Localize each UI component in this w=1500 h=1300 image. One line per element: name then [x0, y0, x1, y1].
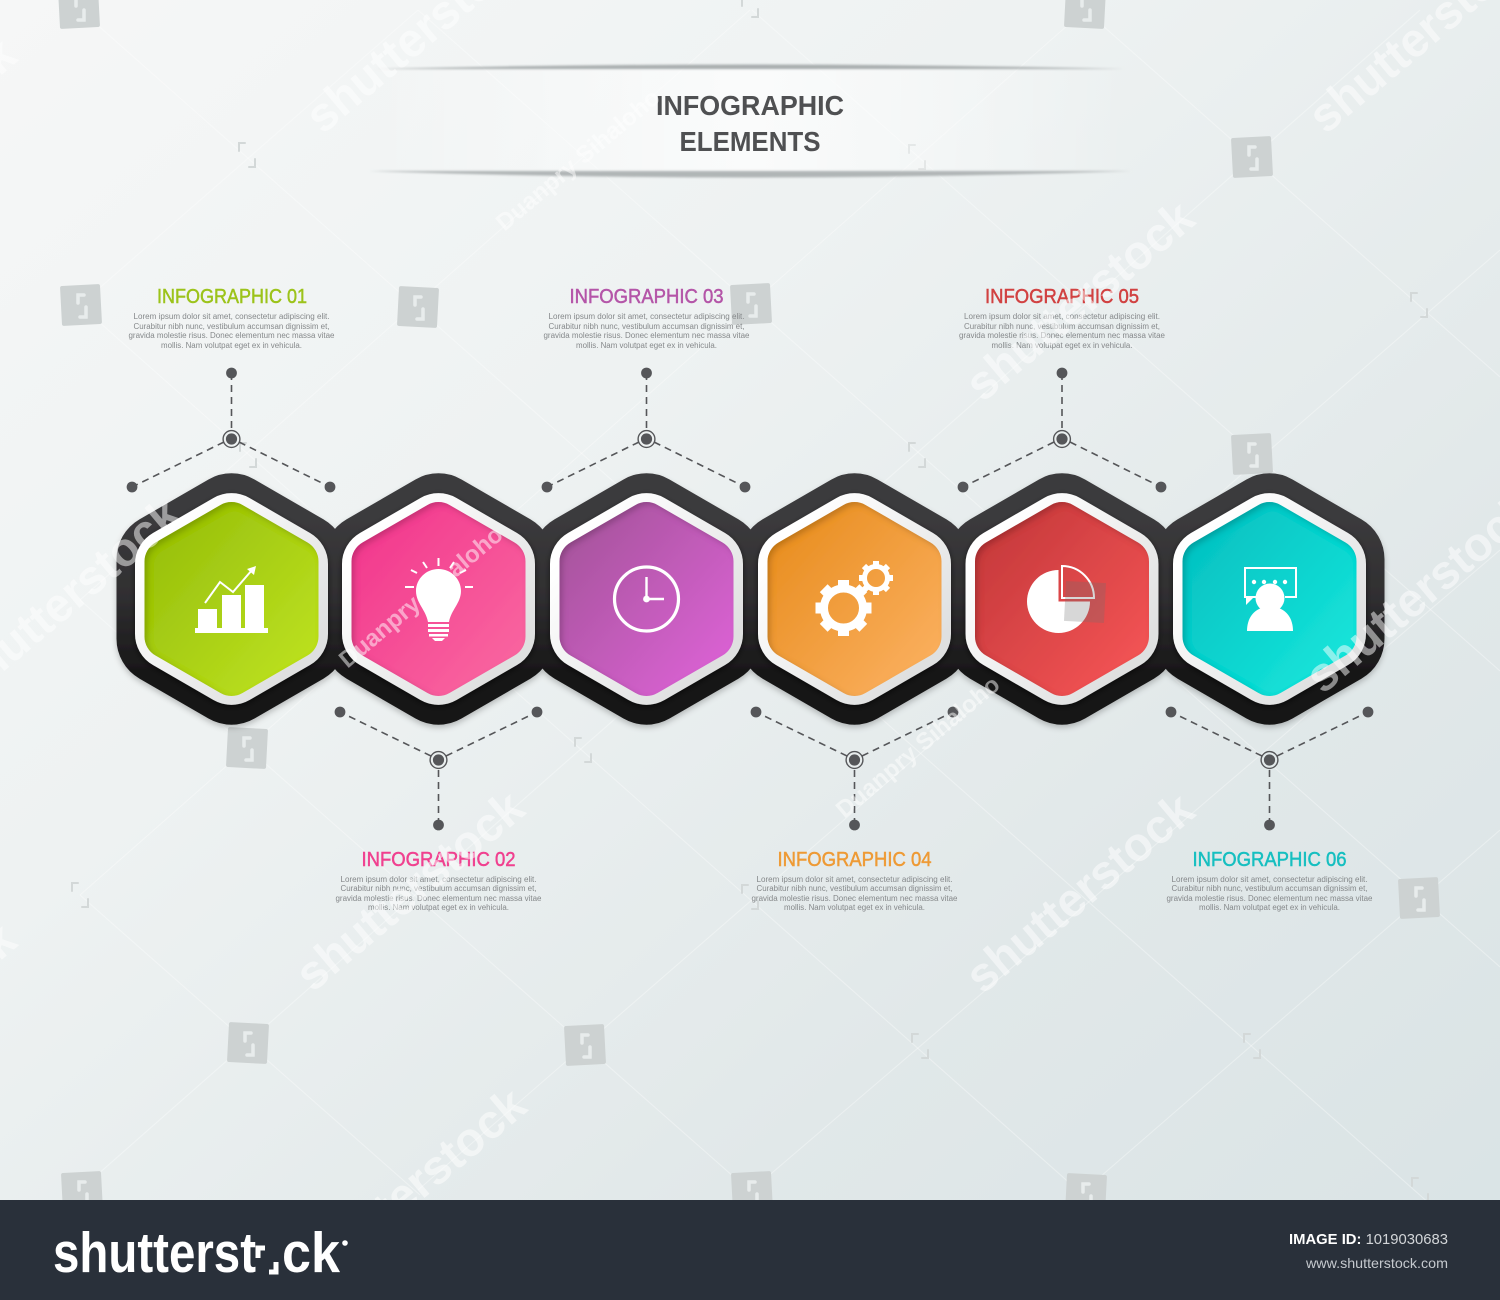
- text block 04: [752, 848, 958, 912]
- text block 04: mollis. Nam volutpat eget ex in vehicula.: [784, 903, 925, 912]
- text block 03: gravida molestie risus. Donec elementum nec massa vitae: [544, 331, 750, 340]
- step 6 hexagon: teal: [1204, 524, 1334, 674]
- text block 03: Lorem ipsum dolor sit amet, consectetur adipiscing elit.: [548, 312, 744, 321]
- connector 4: [751, 707, 958, 830]
- stock watermark text: Duanpry Sihaloho: [334, 521, 508, 673]
- title banner: [368, 64, 1132, 178]
- footer image id: [1289, 1231, 1448, 1271]
- text block 03: Curabitur nibh nunc, vestibulum accumsan dignissim et,: [548, 322, 744, 331]
- step 3 hexagon: purple: [582, 524, 712, 674]
- text block 02: mollis. Nam volutpat eget ex in vehicula.: [368, 903, 509, 912]
- connector 6: [1166, 707, 1373, 830]
- text block 05: [959, 285, 1166, 350]
- icon: person with speech box: [1245, 568, 1296, 631]
- step 2 hexagon: pink: [374, 524, 504, 674]
- text block 05: mollis. Nam volutpat eget ex in vehicula.: [992, 341, 1132, 350]
- text block 02: INFOGRAPHIC 02: [362, 848, 516, 871]
- text block 04: gravida molestie risus. Donec elementum nec massa vitae: [752, 894, 958, 903]
- stock watermark text: Duanpry Sihaloho: [831, 671, 1005, 823]
- text block 06: Curabitur nibh nunc, vestibulum accumsan dignissim et,: [1172, 884, 1368, 893]
- text block 06: mollis. Nam volutpat eget ex in vehicula.: [1199, 903, 1340, 912]
- icon: pie chart: [1027, 566, 1106, 633]
- text block 02: Lorem ipsum dolor sit amet, consectetur adipiscing elit.: [340, 875, 536, 884]
- icon: gears: [816, 561, 893, 636]
- footer logo: shutterst: [53, 1221, 256, 1285]
- text block 03: mollis. Nam volutpat eget ex in vehicula.: [576, 341, 717, 350]
- connector 3: [542, 368, 750, 492]
- step 4 hexagon: orange: [790, 524, 920, 674]
- footer logo: ck: [282, 1221, 340, 1285]
- stock watermark text: shutterstock: [956, 783, 1205, 1003]
- icon: clock: [614, 567, 678, 631]
- text block 04: Lorem ipsum dolor sit amet, consectetur adipiscing elit.: [756, 875, 952, 884]
- icon: bar chart with rising arrow: [195, 566, 268, 633]
- stock watermark text: shutterstock: [286, 781, 535, 1001]
- text block 04: INFOGRAPHIC 04: [778, 848, 932, 871]
- text block 06: Lorem ipsum dolor sit amet, consectetur adipiscing elit.: [1172, 875, 1368, 884]
- connector 2: [335, 707, 542, 830]
- text block 01: Curabitur nibh nunc, vestibulum accumsan dignissim et,: [134, 322, 330, 331]
- text block 02: [336, 848, 542, 912]
- text block 01: [128, 285, 335, 350]
- text block 03: INFOGRAPHIC 03: [570, 285, 724, 308]
- dark hexagon band: [162, 519, 1338, 679]
- stock watermark text: shutterstock: [288, 1078, 537, 1298]
- text block 06: [1166, 848, 1373, 912]
- footer image id: IMAGE ID: 1019030683: [1289, 1231, 1448, 1248]
- footer image id: www.shutterstock.com: [1305, 1255, 1448, 1271]
- text block 01: gravida molestie risus. Donec elementum nec massa vitae: [128, 331, 335, 340]
- text block 01: mollis. Nam volutpat eget ex in vehicula.: [161, 341, 302, 350]
- stock watermark text: Duanpry Sihaloho: [491, 84, 665, 236]
- text block 06: gravida molestie risus. Donec elementum nec massa vitae: [1166, 894, 1373, 903]
- text block 05: Curabitur nibh nunc, vestibulum accumsan dignissim et,: [964, 322, 1160, 331]
- text block 02: Curabitur nibh nunc, vestibulum accumsan dignissim et,: [340, 884, 536, 893]
- text block 01: Lorem ipsum dolor sit amet, consectetur adipiscing elit.: [134, 312, 330, 321]
- text block 02: gravida molestie risus. Donec elementum nec massa vitae: [336, 894, 542, 903]
- text block 05: INFOGRAPHIC 05: [985, 285, 1139, 308]
- step 5 hexagon: red: [997, 524, 1127, 674]
- text block 05: gravida molestie risus. Donec elementum nec massa vitae: [959, 331, 1166, 340]
- icon: light bulb: [405, 558, 473, 641]
- text block 03: [544, 285, 750, 350]
- text block 05: Lorem ipsum dolor sit amet, consectetur adipiscing elit.: [964, 312, 1160, 321]
- stock watermark text: shutterstock: [956, 191, 1205, 411]
- connector 5: [958, 368, 1166, 492]
- connector 1: [127, 368, 335, 492]
- step 1 hexagon: green: [166, 524, 296, 674]
- text block 01: INFOGRAPHIC 01: [157, 285, 307, 308]
- footer bar: [0, 1200, 1500, 1300]
- title: INFOGRAPHIC: [656, 90, 844, 121]
- text block 06: INFOGRAPHIC 06: [1192, 848, 1346, 871]
- title: [656, 90, 844, 157]
- title: ELEMENTS: [680, 126, 820, 157]
- text block 04: Curabitur nibh nunc, vestibulum accumsan dignissim et,: [756, 884, 952, 893]
